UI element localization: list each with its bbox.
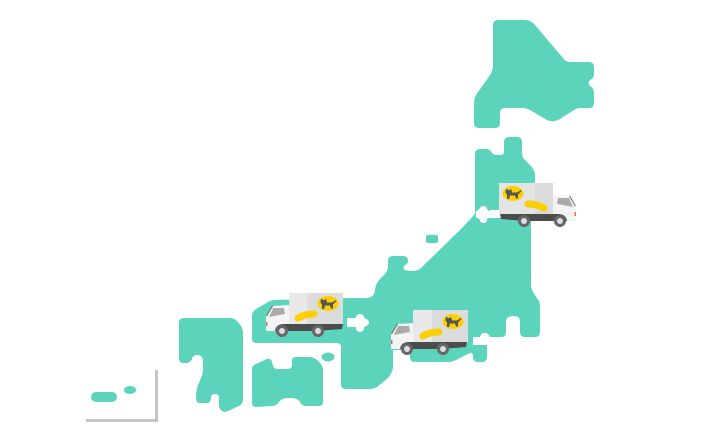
strait: white plus at Tsugaru side xyxy=(476,206,502,223)
strait: white plus at Kanto xyxy=(473,333,490,345)
island: Okinawa xyxy=(91,392,117,402)
island: Sado xyxy=(426,235,438,243)
island: Kyushu xyxy=(179,318,243,412)
truck: north, facing right xyxy=(499,183,576,227)
island: Shikoku xyxy=(252,357,323,407)
strait: white plus at Kansai xyxy=(347,314,369,332)
truck: central, facing left xyxy=(391,310,468,355)
island: Hokkaido xyxy=(474,20,594,128)
inset frame for Okinawa xyxy=(86,370,158,422)
island: Amami xyxy=(124,386,136,394)
island: Honshu xyxy=(252,137,540,389)
truck: west, facing left xyxy=(266,293,343,337)
island: Awaji xyxy=(322,352,334,362)
